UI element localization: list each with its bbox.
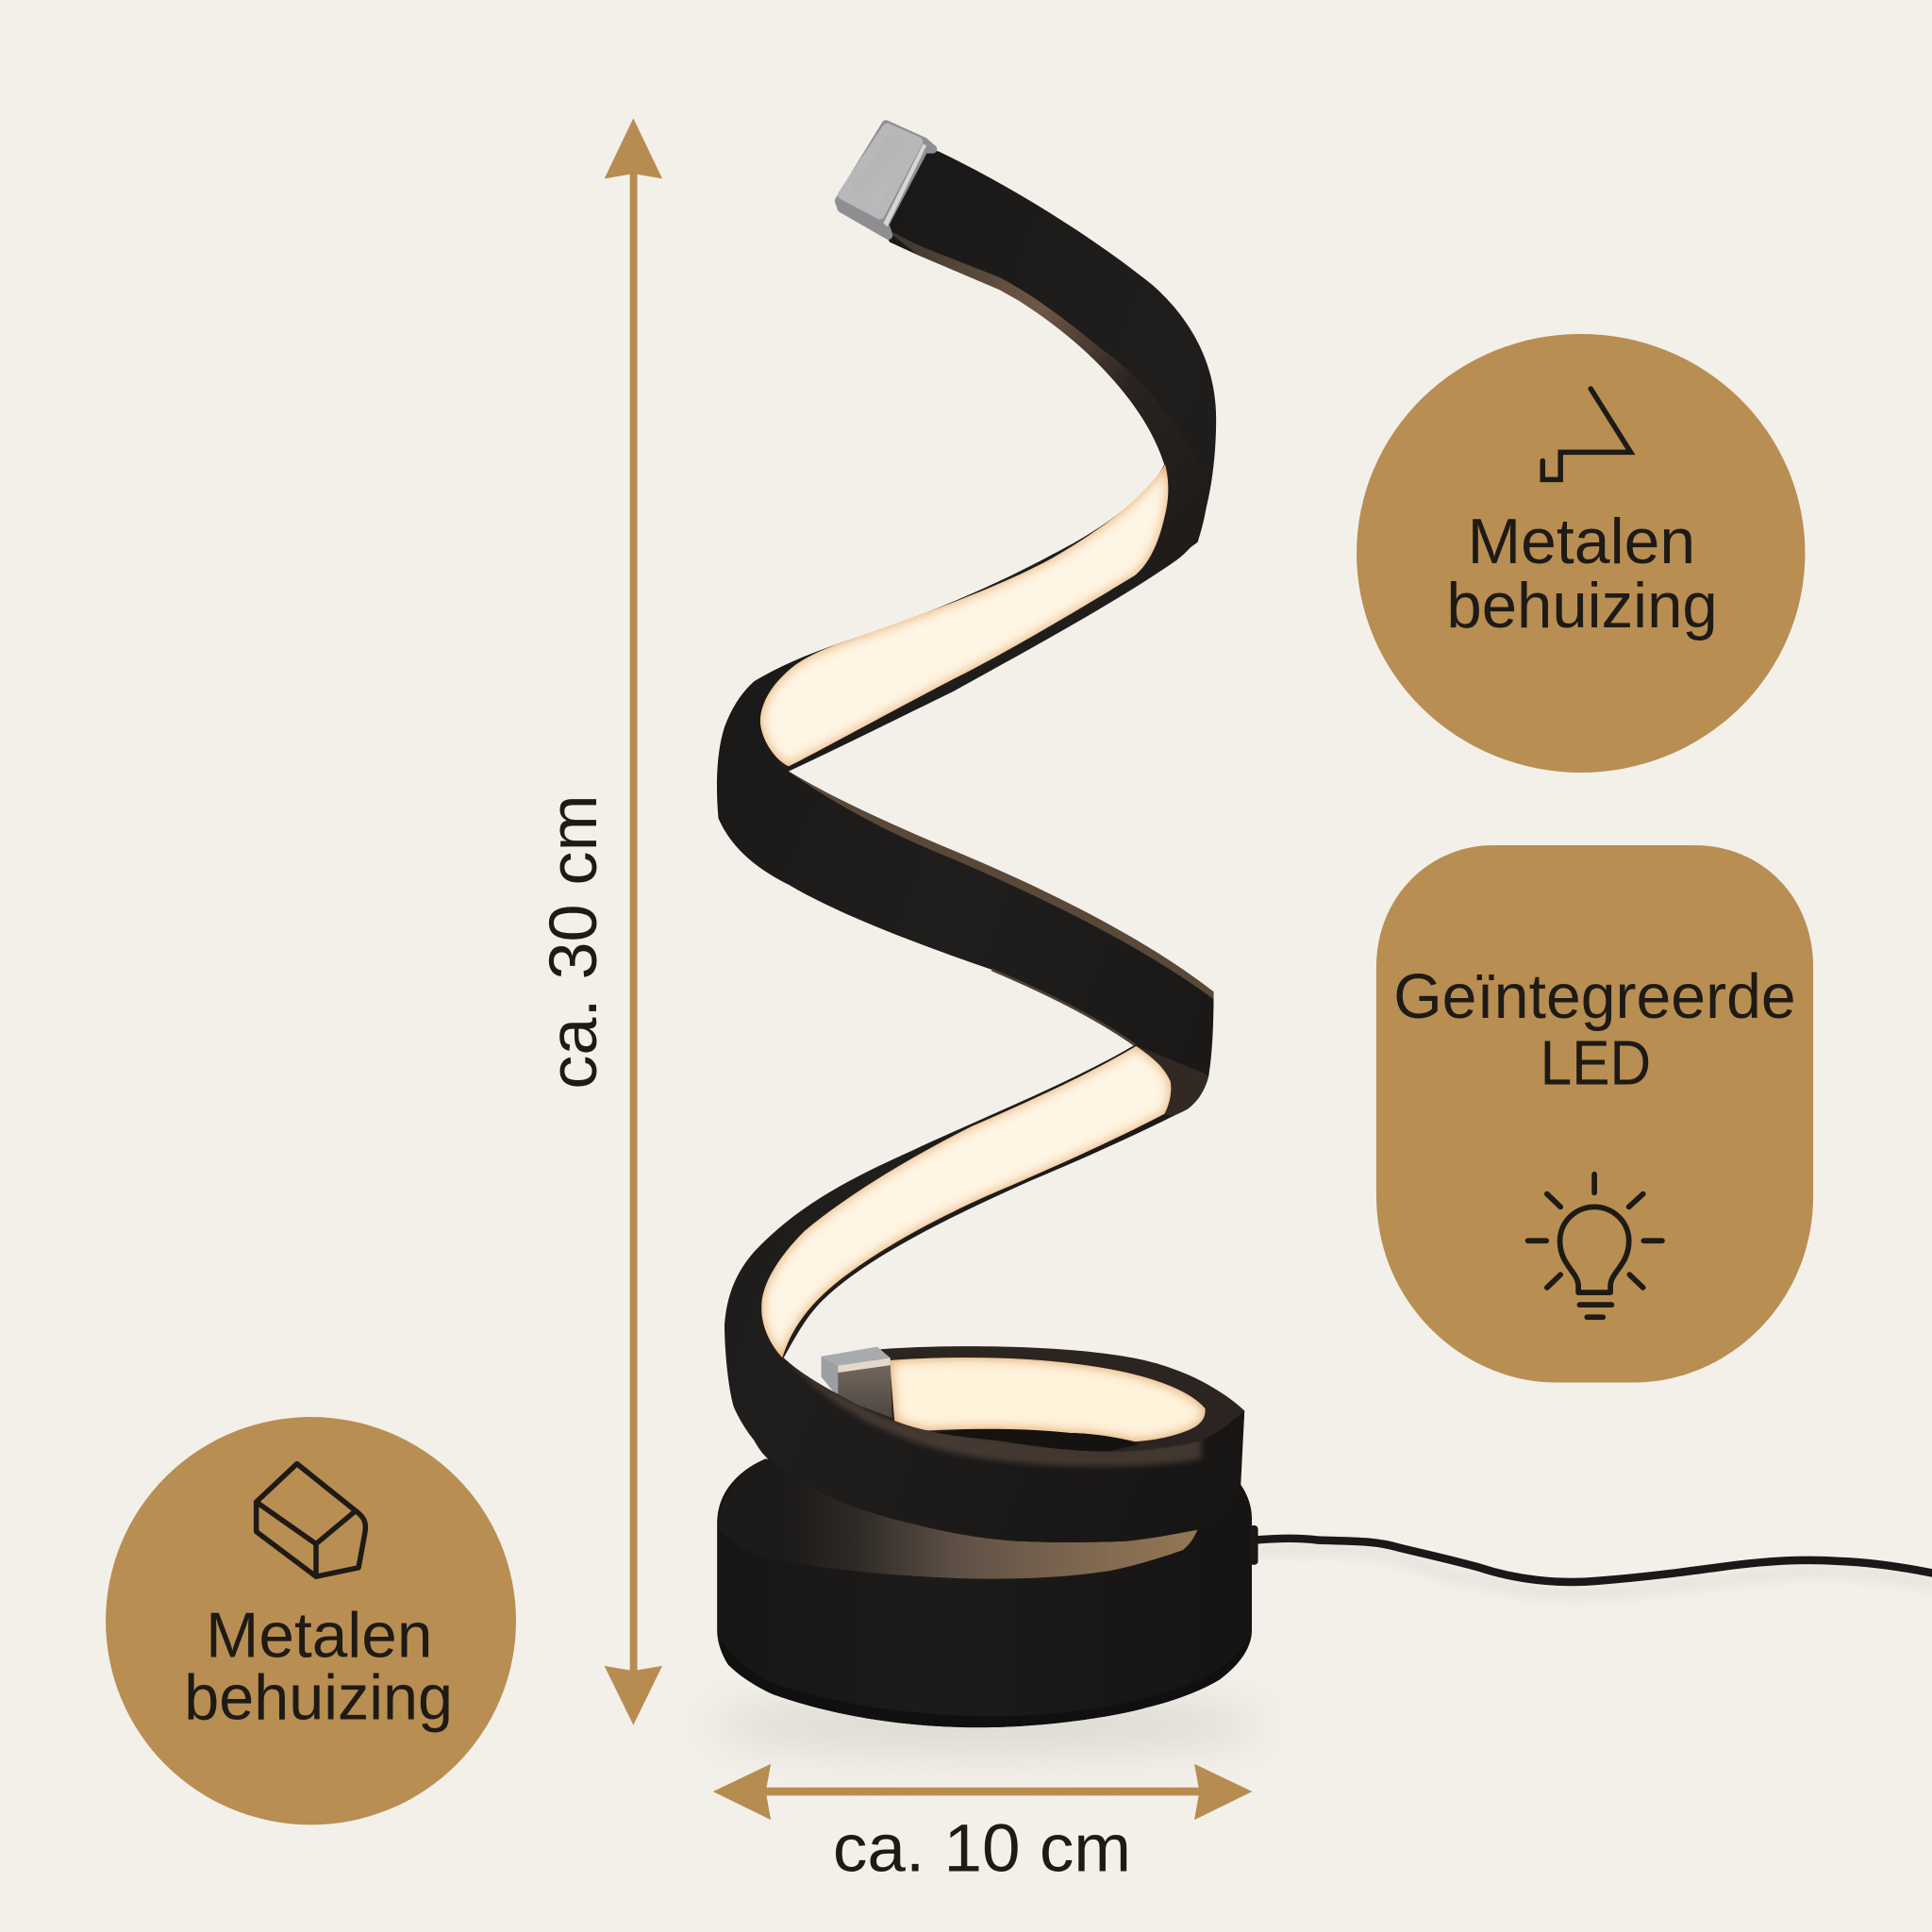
ribbon inner sliver middle — [789, 772, 1214, 999]
label: geintegreerde: Geïntegreerde — [1393, 962, 1796, 1032]
ribbon lower edge reflection — [991, 970, 1135, 1045]
ring inner dark arc — [912, 1428, 1140, 1460]
lamp spiral ribbon — [717, 148, 1244, 1542]
bronze reflection wedge — [718, 1458, 1198, 1579]
icon: box — [257, 1464, 365, 1576]
power switch nub — [1249, 1525, 1258, 1565]
ring glow — [891, 1357, 1206, 1441]
icon: light bulb — [1528, 1174, 1662, 1317]
lower chrome end cap — [822, 1347, 892, 1418]
ribbon front band warm reflection — [791, 1356, 1202, 1466]
panel: left circle metal housing — [106, 1417, 516, 1824]
label: behuizing: behuizing — [184, 1663, 453, 1734]
label: width ca. 10 cm: ca. 10 cm — [833, 1810, 1131, 1886]
label: metalen: Metalen — [206, 1601, 432, 1672]
ribbon inner surface around lower glow — [1135, 1045, 1208, 1116]
lamp base — [717, 1458, 1258, 1727]
glow: lower LED strip — [761, 1046, 1172, 1358]
lamp ring back and inner — [857, 1346, 1245, 1452]
arrow: width dimension — [713, 1764, 1252, 1820]
upper silver end cap — [839, 125, 933, 235]
panel: right circle metal housing — [1357, 334, 1805, 773]
label: LED: LED — [1541, 1028, 1651, 1098]
label: behuizing: behuizing — [1446, 571, 1718, 641]
ribbon inner surface top — [882, 226, 1208, 575]
base felt foot — [721, 1634, 1251, 1727]
arrow: height dimension — [605, 118, 662, 1725]
lamp shadow — [708, 1695, 1263, 1755]
panel: integrated LED rounded card — [1376, 845, 1813, 1382]
glow: upper LED strip — [760, 464, 1168, 766]
label: metalen: Metalen — [1468, 507, 1695, 577]
cable — [1255, 1539, 1932, 1593]
icon: angular profile — [1542, 389, 1631, 479]
label: height ca. 30 cm: ca. 30 cm — [536, 794, 611, 1090]
